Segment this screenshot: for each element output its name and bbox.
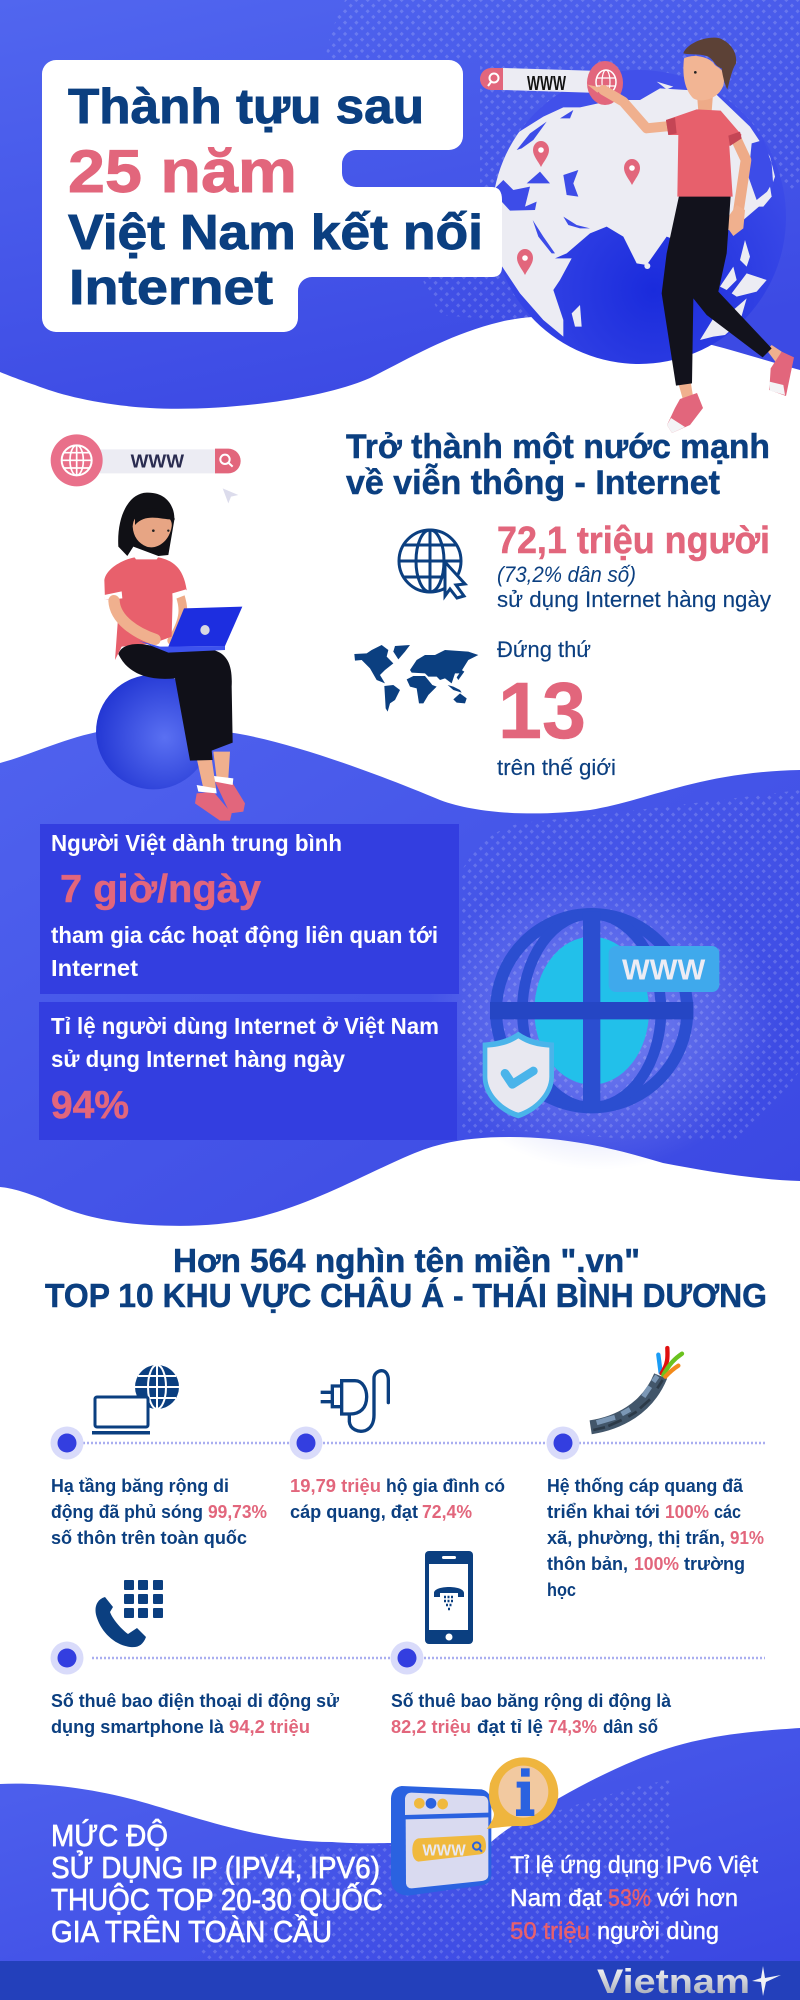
text: smartphone subscribers: dụng smartphone là: [51, 1717, 225, 1737]
info bubble: [487, 1757, 558, 1829]
marker: [50, 1426, 84, 1460]
text: IP usage heading: SỬ DỤNG IP (IPV4, IPV6): [51, 1849, 380, 1885]
cursor: [223, 488, 238, 503]
search bar: WWW: [131, 450, 184, 471]
search bar: [51, 434, 241, 486]
timeline row 1: [50, 1426, 765, 1460]
text: mobile broadband subscribers: 82,2 triệu: [391, 1717, 471, 1737]
text: fibre network: triển khai tới: [547, 1502, 660, 1522]
text: IP usage heading: [51, 1818, 383, 1949]
text: IPv6 rate: với hơn: [657, 1885, 738, 1912]
text: mobile broadband subscribers: 74,3%: [548, 1717, 597, 1737]
text: mobile broadband coverage: 99,73%: [208, 1502, 267, 1522]
panel: daily hours: 7 giờ/ngày: [60, 868, 261, 911]
legs: [678, 382, 693, 403]
title text: 25 năm: [68, 138, 297, 205]
browser: WWW: [422, 1843, 466, 1860]
logo: Vietnam+: Vietnam: [597, 1963, 750, 2000]
text: fibre network: Hệ thống cáp quang đã: [547, 1476, 744, 1496]
arms: [603, 90, 670, 128]
left arm: [114, 601, 155, 639]
panel: daily usage rate: sử dụng Internet hàng ngày: [51, 1046, 345, 1072]
title text: Thành tựu sau: [68, 80, 424, 134]
hair back: [118, 493, 174, 556]
text: smartphone subscribers: Số thuê bao điện thoại di động sử: [51, 1691, 340, 1711]
search bar: www: WWW: [527, 73, 566, 95]
stat: rank 13: Đứng thứ: [497, 637, 591, 662]
globe: [487, 70, 786, 364]
marker: [390, 1642, 424, 1674]
timeline row 2: [50, 1642, 765, 1674]
map pins: [517, 141, 640, 275]
title card: [42, 60, 502, 332]
title text: Internet: [69, 261, 273, 315]
text: mobile broadband coverage: Hạ tầng băng rộng di: [51, 1476, 229, 1496]
browser: [391, 1786, 491, 1896]
title text: Việt Nam kết nối: [68, 206, 483, 260]
text: mobile broadband coverage: số thôn trên toàn quốc: [51, 1528, 247, 1548]
background: dotted world map, header: [325, 0, 800, 190]
panel: daily usage rate: Tỉ lệ người dùng Internet ở Việt Nam: [51, 1013, 439, 1039]
background: middle wave section: [0, 728, 800, 1226]
background: dotted world map, middle: [462, 790, 800, 1140]
icon: globe with cursor: [399, 530, 465, 598]
background: header wave: [0, 0, 800, 409]
icon: fibre cable: [591, 1348, 682, 1430]
stat: rank 13: trên thế giới: [497, 755, 616, 780]
right arm: [172, 595, 183, 641]
illustration: browser and info bubble: [391, 1757, 558, 1896]
text: fibre households: hộ gia đình có: [386, 1476, 505, 1496]
panel: daily hours: tham gia các hoạt động liên quan tới: [51, 922, 438, 948]
text: fibre network: 100%: [665, 1502, 709, 1522]
trousers: [118, 644, 233, 761]
text: smartphone subscribers: 94,2 triệu: [229, 1717, 310, 1737]
text: IP usage heading: MỨC ĐỘ: [51, 1818, 168, 1853]
illustration: woman on ball: [51, 434, 245, 821]
text: IPv6 rate: 53%: [608, 1885, 651, 1912]
illustration: www globe with shield: WWW: [622, 954, 706, 986]
text: mobile broadband coverage: [51, 1476, 267, 1548]
background: globe glow: [425, 870, 775, 1170]
text: IPv6 rate: Tỉ lệ ứng dụng IPv6 Việt: [510, 1852, 758, 1879]
marker: [290, 1426, 322, 1460]
section heading: domains: Hơn 564 nghìn tên miền ".vn": [173, 1242, 640, 1279]
text: IPv6 rate: Nam đạt: [510, 1885, 602, 1912]
text: IPv6 rate: người dùng: [597, 1918, 719, 1945]
section heading: telecom power: [346, 428, 770, 502]
text: IP usage heading: GIA TRÊN TOÀN CẦU: [51, 1914, 332, 1949]
section heading: telecom power: Trở thành một nước mạnh: [346, 428, 770, 466]
text: fibre network: các: [714, 1502, 741, 1522]
stat: 72,1 million: (73,2% dân số): [497, 562, 636, 587]
icon: plug: [321, 1371, 388, 1431]
background: dotted patch under title: [420, 275, 560, 320]
text: fibre households: 72,4%: [422, 1502, 472, 1522]
background: dotted world map, footer: [200, 1780, 670, 1961]
face: [133, 513, 172, 547]
stat: 72,1 million: [497, 520, 771, 612]
text: fibre network: xã, phường, thị trấn,: [547, 1528, 725, 1548]
shoes: [195, 792, 232, 821]
text: fibre network: thôn bản,: [547, 1554, 628, 1574]
text: fibre network: 91%: [730, 1528, 764, 1548]
stat: 72,1 million: sử dụng Internet hàng ngày: [497, 587, 771, 612]
panel: daily usage rate: [39, 1002, 457, 1140]
search bar: www: [480, 61, 623, 105]
title text: [68, 80, 483, 315]
text: mobile broadband coverage: động đã phủ sóng: [51, 1502, 203, 1522]
illustration: www globe with shield: [483, 912, 719, 1118]
text: IPv6 rate: 50 triệu: [510, 1918, 590, 1945]
footer bar: [0, 1961, 800, 2000]
section heading: domains: TOP 10 KHU VỰC CHÂU Á - THÁI BÌNH DƯƠNG: [45, 1277, 767, 1314]
background: footer wave section: [0, 1728, 800, 1961]
seas: [493, 110, 773, 253]
panel: daily hours: Internet: [51, 955, 138, 981]
icon: world map: [354, 645, 478, 712]
marker: [546, 1426, 580, 1460]
ball: [96, 675, 211, 789]
text: IP usage heading: THUỘC TOP 20-30 QUỐC: [51, 1881, 383, 1917]
shins: [197, 752, 230, 788]
text: fibre households: [290, 1476, 505, 1522]
panel: daily usage rate: 94%: [51, 1084, 129, 1127]
icon: smartphone: [425, 1551, 473, 1644]
text: smartphone subscribers: [51, 1691, 340, 1737]
panel: daily hours: Người Việt dành trung bình: [51, 830, 342, 856]
text: fibre households: cáp quang, đạt: [290, 1502, 418, 1522]
text: IPv6 rate: [510, 1852, 758, 1945]
text: fibre network: trường: [684, 1554, 745, 1574]
shoe: right: [769, 352, 794, 396]
stat: 72,1 million: 72,1 triệu người: [497, 520, 770, 562]
illustration: globe with man: [480, 38, 794, 433]
man: [587, 38, 794, 403]
text: fibre network: 100%: [634, 1554, 679, 1574]
continents: [487, 88, 775, 337]
neck and head: [697, 90, 713, 112]
text: fibre network: [547, 1476, 764, 1600]
marker: [50, 1642, 84, 1674]
trousers: [662, 196, 772, 386]
icon: phone and keypad: [96, 1580, 163, 1647]
text: mobile broadband subscribers: đạt tỉ lệ: [477, 1717, 543, 1737]
section heading: domains: [45, 1242, 767, 1314]
panel: daily hours: [40, 824, 459, 994]
stat: rank 13: 13: [498, 666, 586, 755]
shirt: [104, 557, 187, 660]
laptop: [138, 641, 225, 653]
shoe: left: [667, 393, 703, 433]
text: mobile broadband subscribers: [391, 1691, 672, 1737]
stat: rank 13: [497, 637, 616, 780]
text: mobile broadband subscribers: dân số: [603, 1717, 658, 1737]
text: fibre network: học: [547, 1580, 576, 1600]
text: fibre households: 19,79 triệu: [290, 1476, 381, 1496]
section heading: telecom power: về viễn thông - Internet: [346, 464, 720, 502]
shirt: [666, 109, 742, 197]
icon: laptop and globe: [92, 1365, 179, 1434]
text: mobile broadband subscribers: Số thuê bao băng rộng di động là: [391, 1691, 672, 1711]
